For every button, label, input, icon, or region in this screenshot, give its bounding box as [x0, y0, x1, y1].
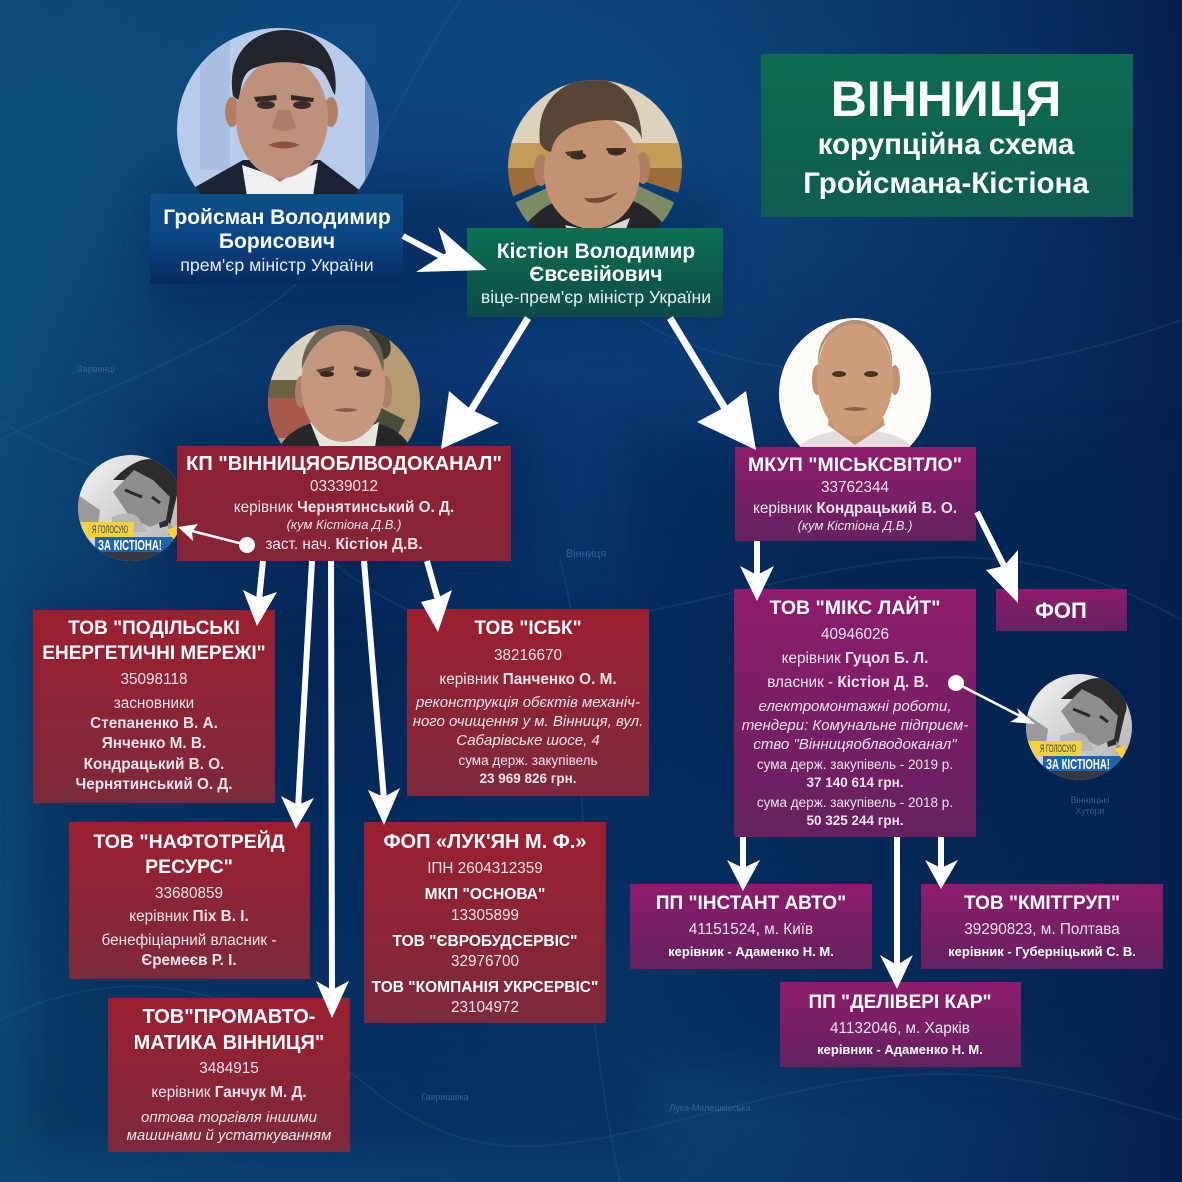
panel: Podilski: засновники [114, 695, 194, 712]
panel: Groysman: прем'єр міністр України [180, 255, 374, 275]
panel: Kmitgrup: керівник - Губерніцький С. В. [948, 944, 1136, 959]
panel: Groysman [150, 194, 403, 284]
panel: Promavtomatyka: машинами й устаткуванням [127, 1127, 331, 1144]
panel: Miks Lait: 50 325 244 грн. [806, 813, 904, 828]
panel: Miks Lait: електромонтажні роботи, [758, 698, 952, 715]
panel: ISBK: ного очищення у м. Вінниця, вул. [413, 713, 643, 730]
panel: Naftotreid [69, 822, 310, 979]
arrow: KP to Naftotreid [281, 561, 314, 829]
panel: Podilski: ТОВ "ПОДІЛЬСЬКІ [68, 618, 240, 639]
panel: Naftotreid: керівник Піх В. І. [129, 908, 249, 925]
photo: Kistion D.V. campaign right: Я ГОЛОСУЮ [1040, 743, 1076, 755]
panel: Naftotreid: Єремеєв Р. І. [141, 952, 237, 969]
panel: Miks Lait: 40946026 [821, 626, 889, 643]
panel: Miks Lait: ство "Вінницяоблводоканал" [753, 736, 957, 753]
panel: Naftotreid: ТОВ "НАФТОТРЕЙД [93, 829, 285, 853]
panel: FOP: ФОП [1035, 598, 1087, 623]
panel: KP Vinnytsiaoblvodokanal: 03339012 [310, 478, 378, 495]
panel: KP Vinnytsiaoblvodokanal: КП "ВІННИЦЯОБЛВОДОКАНАЛ" [186, 453, 502, 475]
panel: ISBK: 23 969 826 грн. [479, 771, 577, 786]
map background: Вінниця [566, 548, 606, 560]
photo: Kistion D.V. campaign left: ЗА КІСТІОНА! [98, 537, 162, 554]
arrow: Kistion to KP [441, 318, 528, 449]
panel: Naftotreid: РЕСУРС" [145, 856, 233, 878]
panel: ISBK: керівник Панченко О. М. [439, 671, 617, 688]
arrow: KP to Promavtomatyka [316, 561, 349, 1018]
panel: KP Vinnytsiaoblvodokanal: заст. нач. Кістіон Д.В. [265, 536, 423, 553]
panel: Miks Lait: сума держ. закупівель - 2019 р. [757, 757, 953, 772]
panel: Miks Lait: 37 140 614 грн. [806, 775, 904, 790]
panel: Podilski [33, 610, 275, 803]
panel: Naftotreid: бенефіціарний власник - [102, 932, 276, 949]
map background: Лука-Мелешківська [669, 1103, 751, 1113]
arrow: MKUP to Miks Lait [740, 541, 774, 601]
panel: MKUP Miskysvitlo: керівник Кондрацький В. О. [753, 500, 957, 517]
panel: MKUP Miskysvitlo: 33762344 [821, 479, 890, 496]
panel: Miks Lait: сума держ. закупівель - 2018 р. [757, 795, 953, 810]
photo: Kistion D.V. campaign right: ЗА КІСТІОНА! [1046, 756, 1110, 773]
panel: Podilski: Кондрацький В. О. [84, 756, 224, 773]
photo: Kistion D.V. campaign left: Я ГОЛОСУЮ [92, 524, 128, 536]
photo: Kistion D.V. campaign right [1026, 674, 1134, 784]
panel: Podilski: ЕНЕРГЕТИЧНІ МЕРЕЖІ" [42, 643, 266, 664]
panel: Miks Lait [734, 589, 976, 837]
panel: Promavtomatyka: оптова торгівля іншими [141, 1109, 318, 1126]
arrow: Miks Lait owner to photo [948, 675, 1035, 724]
panel: Groysman: Гройсман Володимир [163, 206, 391, 229]
arrow: Miks Lait to Kmitgrup [925, 837, 958, 889]
title panel: ВІННИЦЯ [831, 71, 1061, 127]
panel: Podilski: Чернятинський О. Д. [75, 776, 233, 793]
panel: Instant Avto: 41151524, м. Київ [689, 921, 813, 938]
panel: Kmitgrup: 39290823, м. Полтава [964, 921, 1120, 938]
arrow: KP deputy to photo [178, 524, 255, 553]
panel: MKUP Miskysvitlo [735, 447, 976, 541]
panel: Kistion: Кістіон Володимир [497, 240, 695, 263]
photo: Groysman [177, 28, 379, 194]
panel: MKUP Miskysvitlo: (кум Кістіона Д.В.) [798, 518, 912, 533]
panel: FOP Lukian: ТОВ "КОМПАНІЯ УКРСЕРВІС" [372, 979, 598, 996]
panel: Promavtomatyka: керівник Ганчук М. Д. [151, 1084, 307, 1101]
panel: Instant Avto: керівник - Адаменко Н. М. [668, 944, 834, 959]
panel: FOP Lukian: ТОВ "ЄВРОБУДСЕРВІС" [393, 933, 577, 950]
panel: Podilski: 35098118 [121, 671, 187, 688]
arrow: Miks Lait to Deliveri Kar [880, 837, 913, 989]
panel: Miks Lait: керівник Гуцол Б. Л. [782, 650, 928, 667]
panel: Naftotreid: 33680859 [155, 885, 223, 902]
panel: KP Vinnytsiaoblvodokanal: керівник Чернятинський О. Д. [234, 499, 454, 516]
map background: Зарванці [77, 364, 115, 374]
panel: FOP Lukian: ІПН 2604312359 [427, 860, 543, 877]
title panel [761, 54, 1133, 217]
panel: FOP Lukian: 32976700 [451, 953, 519, 970]
arrow: Miks Lait to Instant Avto [727, 837, 760, 891]
panel: FOP Lukian [364, 822, 606, 1023]
panel: Deliveri Kar: 41132046, м. Харків [830, 1020, 970, 1037]
panel: ISBK: сума держ. закупівель [458, 753, 598, 768]
arrow: KP to ISBK [421, 561, 452, 632]
panel: FOP Lukian: 13305899 [451, 907, 519, 924]
title panel: корупційна схема [818, 128, 1075, 161]
panel: Miks Lait: тендери: Комунальне підприєм- [742, 717, 968, 734]
panel: Kmitgrup: ТОВ "КМІТГРУП" [964, 893, 1120, 914]
photo: Chernyatinsky [268, 325, 420, 446]
photo: Kondratsky [779, 318, 931, 447]
panel: Deliveri Kar: ПП "ДЕЛІВЕРІ КАР" [808, 992, 992, 1013]
arrow: KP to Podilski [243, 561, 277, 626]
panel: MKUP Miskysvitlo: МКУП "МІСЬКСВІТЛО" [748, 454, 962, 476]
panel: Instant Avto: ПП "ІНСТАНТ АВТО" [656, 893, 846, 914]
panel: ISBK: Сабарівське шосе, 4 [456, 732, 600, 749]
panel: ISBK: реконструкція обєктів механіч- [415, 694, 640, 711]
panel: Groysman: Борисович [219, 230, 335, 253]
panel: Promavtomatyka: МАТИКА ВІННИЦЯ" [134, 1032, 324, 1054]
panel: KP Vinnytsiaoblvodokanal: (кум Кістіона Д.В.) [287, 517, 401, 532]
panel: Miks Lait: ТОВ "МІКС ЛАЙТ" [769, 595, 941, 619]
panel: ISBK: ТОВ "ІСБК" [474, 618, 582, 639]
panel: ISBK: 38216670 [494, 647, 562, 664]
panel: Instant Avto [630, 884, 872, 969]
panel: KP Vinnytsiaoblvodokanal [177, 446, 511, 561]
arrow: KP to FOP Lukian [364, 561, 400, 825]
panel: Deliveri Kar: керівник - Адаменко Н. М. [817, 1042, 983, 1057]
panel: Kistion: Євсевійович [529, 263, 663, 286]
panel: FOP Lukian: ФОП «ЛУК'ЯН М. Ф.» [383, 831, 587, 853]
title panel: Гройсмана-Кістіона [803, 167, 1089, 200]
panel: Miks Lait: власник - Кістіон Д. В. [767, 674, 929, 691]
map background: Гавришівка [421, 1092, 469, 1102]
map background: Хутори [1075, 806, 1105, 816]
panel: Promavtomatyka: 3484915 [199, 1060, 259, 1077]
panel: Kmitgrup [921, 884, 1163, 969]
panel: Kistion [467, 228, 723, 317]
arrow: Kistion to MKUP [670, 318, 756, 450]
arrow: MKUP to FOP [977, 512, 1018, 603]
panel: Podilski: Янченко М. В. [102, 735, 206, 752]
panel: FOP [996, 589, 1127, 631]
panel: FOP Lukian: МКП "ОСНОВА" [425, 886, 545, 903]
panel: Kistion: віце-прем'єр міністр України [481, 287, 711, 307]
panel: Promavtomatyka: ТОВ"ПРОМАВТО- [143, 1006, 315, 1028]
panel: ISBK [407, 609, 649, 796]
panel: Promavtomatyka [108, 998, 350, 1152]
photo: Kistion D.V. campaign left [78, 455, 177, 561]
arrow: Groysman to Kistion [403, 227, 487, 272]
panel: Podilski: Степаненко В. А. [90, 715, 218, 732]
photo: Kistion [508, 80, 682, 228]
map background: Вінницькі [1071, 795, 1109, 805]
panel: Deliveri Kar [780, 982, 1021, 1067]
panel: FOP Lukian: 23104972 [451, 999, 519, 1016]
